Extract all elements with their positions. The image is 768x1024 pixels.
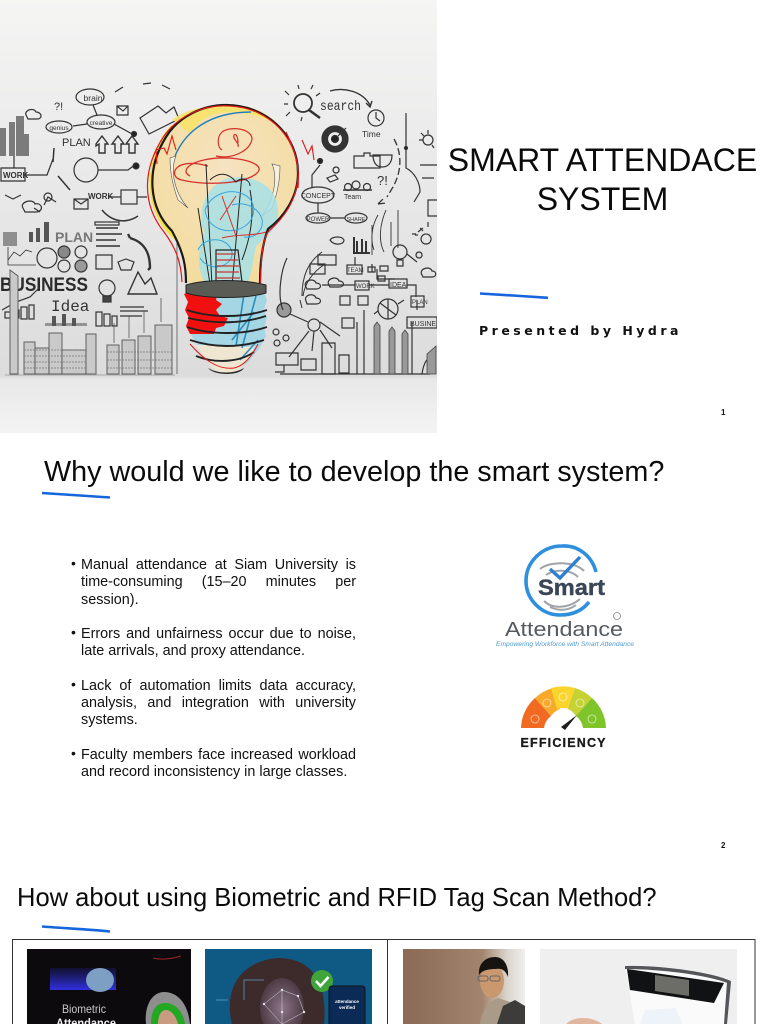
hero image: light bulb and business doodles on a concrete wall: CONCEPT: [301, 193, 336, 200]
photo: student scanning RFID tag: [403, 949, 525, 1024]
photo: biometric attendance: Biometric: [62, 1002, 106, 1016]
logo word Attendance: Attendance: [505, 618, 623, 641]
bullet: time-consuming: session).: [81, 592, 139, 608]
bullet: automation: analysis, and integration with university: [81, 695, 356, 711]
hero image: light bulb and business doodles on a concrete wall: PLAN: [62, 137, 91, 149]
hero image: light bulb and business doodles on a concrete wall: Time: [362, 129, 381, 139]
right doodles: [273, 85, 438, 374]
title: [448, 142, 757, 216]
page number 1: 1: [721, 408, 725, 417]
heading: why develop: Why would we like to develop the smart system?: [44, 456, 664, 488]
hero image: light bulb and business doodles on a concrete wall: WORK: [356, 284, 375, 290]
hero image: light bulb and business doodles on a concrete wall: TEAM: [347, 268, 364, 274]
logo tagline: Empowering Workforce with Smart Attendance: [496, 642, 635, 648]
bullet: automation: systems.: [81, 712, 138, 728]
hero image: light bulb and business doodles on a concrete wall: ?!: [54, 101, 63, 113]
gauge needle: [561, 715, 577, 730]
left doodles: [1, 83, 179, 326]
photo: face recognition: verified: [339, 1005, 355, 1010]
hero image: light bulb and business doodles on a concrete wall: WORK: [88, 192, 114, 201]
bullet: time-consuming: [71, 557, 356, 609]
hero image: light bulb and business doodles on a concrete wall: IDEA: [390, 282, 407, 289]
hero image: light bulb and business doodles on a concrete wall: search: [320, 99, 361, 115]
accent stroke: slide 3: [42, 925, 110, 933]
accent stroke: slide 2: [42, 492, 110, 499]
left buildings and rising bars: [10, 270, 172, 374]
table frame: [12, 940, 755, 1024]
photo: biometric attendance: [27, 949, 191, 1024]
bulb sketch lines: [147, 105, 314, 286]
gauge segments: [521, 686, 606, 728]
hero image: light bulb and business doodles on a concrete wall: Team: [344, 194, 361, 201]
bullet: errors: [71, 626, 356, 660]
hero image: light bulb and business doodles on a concrete wall: BUSINE: [410, 321, 436, 328]
bullet: errors: Errors and unfairness occur due to noise,: [81, 626, 356, 642]
bullet: automation: Lack of automation limits data accuracy,: [81, 678, 356, 694]
bullet: time-consuming: Manual attendance at Siam University is: [81, 557, 356, 573]
comparison table with photos: [12, 939, 756, 1024]
gauge label: EFFICIENCY: [520, 736, 606, 750]
fingerprint arcs: [540, 563, 584, 610]
bullet: errors: late arrivals, and proxy attendance.: [81, 643, 305, 659]
heading: biometric and RFID: How about using Biometric and RFID Tag Scan Method?: [17, 884, 657, 912]
logo ring: [526, 546, 596, 615]
bullet: workload: [71, 747, 356, 781]
logo: Smart Attendance: [496, 544, 635, 648]
photo: RFID tag reader: [540, 949, 737, 1024]
hero image: light bulb and business doodles on a concrete wall: ?!: [377, 173, 388, 188]
bullet: automation: [71, 678, 356, 730]
light bulb: [147, 105, 314, 374]
hero image: light bulb and business doodles on a concrete wall: WORK: [3, 171, 29, 180]
bulb glass: [150, 105, 298, 284]
bullet: workload: and record inconsistency in large classes.: [81, 764, 347, 780]
hero image: light bulb and business doodles on a concrete wall: PLAN: [55, 229, 93, 245]
presenter line: Presented by Hydra: [479, 323, 682, 338]
hero image: light bulb and business doodles on a concrete wall: PLAN: [412, 300, 428, 306]
bullet: workload: Faculty members face increased workload: [81, 747, 356, 763]
title: SMART ATTENDACE: [448, 142, 757, 178]
bullet list: [72, 557, 356, 780]
gauge faces: [531, 693, 596, 723]
hero image: light bulb and business doodles on a concrete wall: genius: [49, 125, 69, 132]
accent stroke: title slide: [480, 292, 548, 300]
hero image: light bulb and business doodles on a concrete wall: POWER: [307, 217, 330, 223]
logo word Smart: Smart: [538, 575, 606, 600]
bulb screw base: [184, 280, 267, 374]
page number 2: 2: [721, 841, 725, 850]
title: SYSTEM: [537, 180, 668, 216]
efficiency gauge: [520, 686, 606, 750]
hero image: light bulb and business doodles on a concrete wall: [0, 0, 437, 433]
photo: face recognition: [205, 949, 372, 1024]
hero image: light bulb and business doodles on a concrete wall: brain: [84, 93, 103, 103]
trademark: [614, 612, 620, 620]
hero image: light bulb and business doodles on a concrete wall: BUSINESS: [0, 275, 88, 296]
hero image: light bulb and business doodles on a concrete wall: creative: [90, 120, 113, 127]
hero image: light bulb and business doodles on a concrete wall: Idea: [51, 298, 90, 316]
hero image: light bulb and business doodles on a concrete wall: SHARE: [347, 217, 366, 223]
bullet: time-consuming: time-consuming (15–20 minutes per: [81, 574, 356, 590]
check mark: [550, 557, 580, 578]
photo: face recognition: attendance: [335, 999, 359, 1004]
